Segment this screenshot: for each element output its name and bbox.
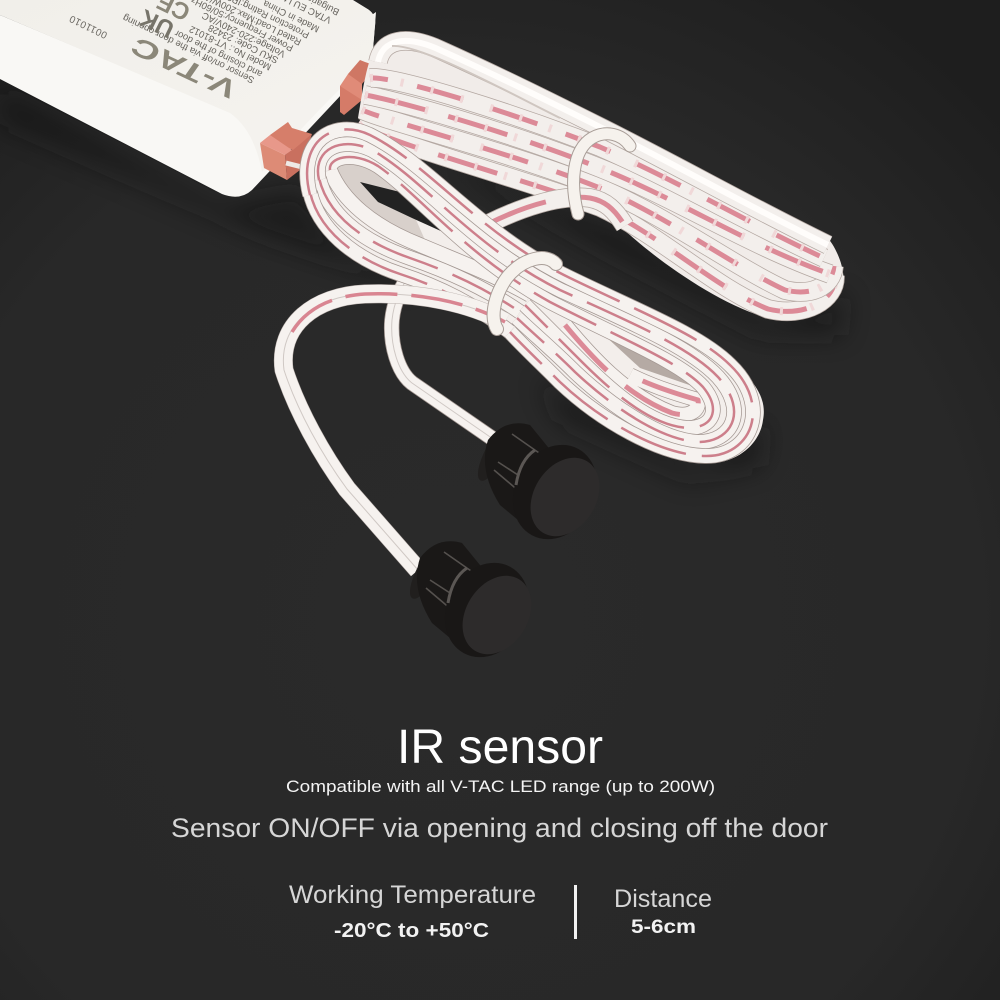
dark gap in coil [360,182,443,232]
sensor collar [472,421,518,485]
sensor face [448,563,546,667]
ribbon crossing behind ties [488,197,625,226]
printed specification label: Sensor on/off via the door opening [121,12,256,85]
sensor cable one [283,294,505,570]
sensor body [485,423,552,530]
coil silhouette [304,126,764,463]
printed specification label: and closing of the door [173,27,264,79]
sensor cap [497,430,613,554]
connector lower [260,122,312,180]
batch number: 0011010 [68,12,109,40]
coil silhouette [358,33,844,319]
sensor cap rim [516,450,535,485]
sensor highlight [494,434,542,492]
box body [0,12,376,197]
printed specification label: SKU Code: 23428 [207,22,280,65]
sensor upper [472,421,614,554]
box top face [0,0,375,172]
sensor cap rim [448,568,467,603]
sensor cable two [392,272,496,441]
zip tie upper [574,134,630,214]
uk mark: UK [135,3,179,43]
distance label: Distance [614,885,712,913]
connector upper [340,60,377,115]
cable coil upper right [358,33,844,319]
divider [574,885,577,939]
printed specification label: Voltage:220-240V/AC [200,9,287,59]
shadows under the product [0,90,845,480]
zip tie lower [494,258,556,329]
working temperature value: -20°C to +50°C [334,920,489,942]
sensor lower [404,539,546,672]
grey gap near tip [590,322,698,388]
working temperature label: Working Temperature [289,881,536,909]
coil inner slit [392,46,560,118]
grey gap near connector [326,160,425,240]
sensor face [516,445,614,549]
printed logo: V-TAC [125,32,243,104]
compatibility line: Compatible with all V-TAC LED range (up to 200W) [286,777,715,796]
sensor cap [429,548,545,672]
printed specification label [121,0,341,85]
controller box [0,0,376,197]
front cable coil [304,126,764,463]
sensor highlight [426,552,474,610]
sensor description: Sensor ON/OFF via opening and closing off the door [171,813,828,843]
distance value: 5-6cm [631,917,696,938]
sensor collar [404,539,450,603]
printed specification label: Model No.: VT-81012 [188,23,273,72]
title: IR sensor [397,721,603,774]
sensor body [417,541,484,648]
